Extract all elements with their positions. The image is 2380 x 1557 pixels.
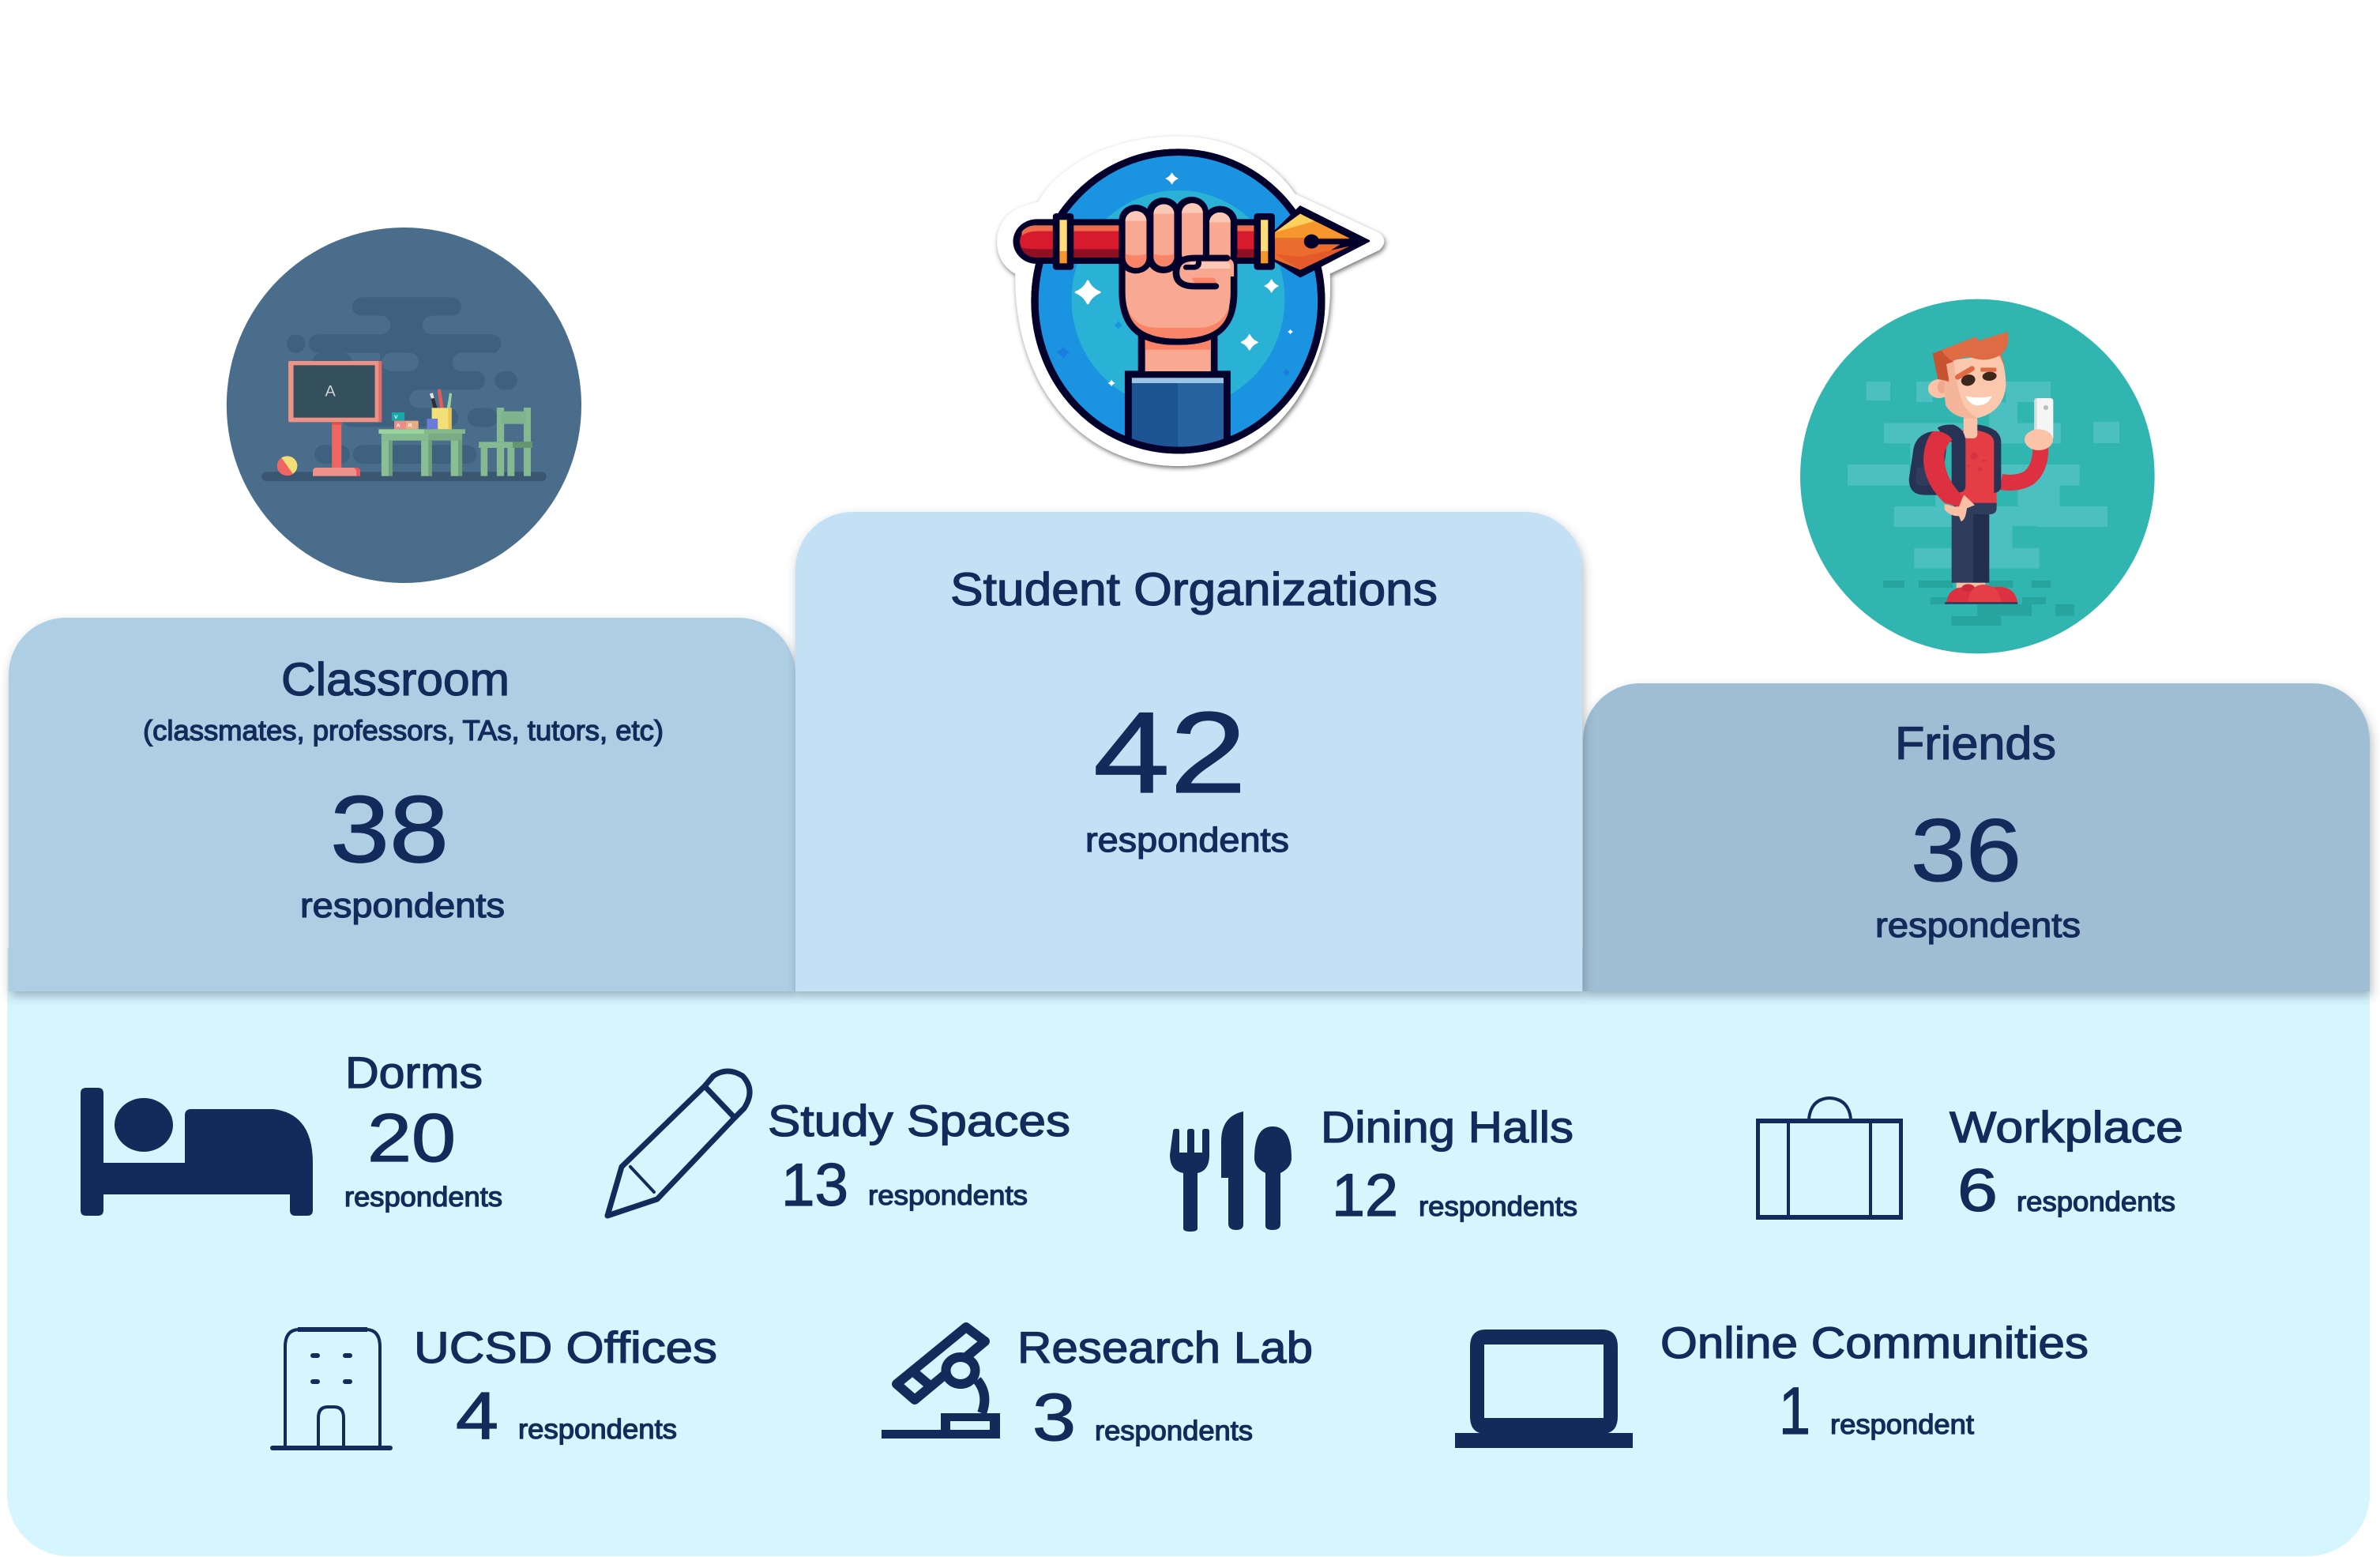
icon: laptop: [1455, 1329, 1633, 1448]
online communities label: Online Communities: [1660, 1318, 2089, 1367]
panel: classroom podium: [9, 618, 795, 991]
panel: student organizations podium: [795, 512, 1582, 991]
icon: classroom illustration: [227, 228, 581, 583]
sparkles: [1056, 173, 1293, 386]
straps: [1938, 424, 2001, 493]
chalkboard: A: [325, 383, 337, 401]
workplace count: 6: [1957, 1157, 1998, 1224]
workplace respondents: respondents: [2017, 1187, 2175, 1217]
icon: office building: [273, 1329, 390, 1448]
venue: research lab: [882, 1322, 1313, 1454]
fist: [1119, 197, 1237, 345]
venue: study spaces: [607, 1071, 1070, 1219]
table: [378, 429, 465, 476]
nib: [1275, 207, 1369, 276]
backpack: [1909, 431, 1949, 495]
study spaces label: Study Spaces: [768, 1096, 1070, 1145]
icon: student with phone: [1800, 299, 2155, 653]
chalkboard: [288, 361, 382, 476]
legs and shoes: [1945, 511, 2017, 604]
icon: pen in fist sticker: [997, 137, 1384, 466]
panel: friends podium: [1583, 683, 2370, 991]
badge circle: [1035, 152, 1322, 450]
student organizations count: 42: [1093, 688, 1246, 817]
icon: pencil: [607, 1071, 750, 1216]
icon: bed: [81, 1088, 313, 1216]
study spaces respondents: respondents: [868, 1180, 1028, 1211]
ball: [277, 456, 297, 476]
blocks and pencil cup: V: [394, 415, 398, 420]
chair: [479, 408, 532, 476]
head: [1928, 332, 2008, 419]
dining halls label: Dining Halls: [1321, 1102, 1574, 1152]
icon: cutlery: [1170, 1111, 1292, 1232]
right arm and phone: [2001, 398, 2053, 483]
dining halls respondents: respondents: [1419, 1191, 1577, 1222]
thumb: [1176, 258, 1234, 286]
left arm and hand: [1923, 431, 1975, 521]
blocks and pencil cup: [392, 389, 452, 429]
friends heading: Friends: [1895, 718, 2056, 769]
torso: [1953, 416, 1997, 514]
panel: lower venues: [7, 948, 2370, 1556]
wrist: [1138, 334, 1217, 371]
workplace label: Workplace: [1949, 1102, 2183, 1152]
icon: microscope: [882, 1327, 1000, 1439]
classroom subheading: (classmates, professors, TAs, tutors, etc): [143, 714, 664, 747]
sticker backing: [997, 137, 1384, 466]
research lab respondents: respondents: [1095, 1416, 1253, 1446]
venue: online communities: [1455, 1318, 2089, 1448]
blocks and pencil cup: A: [397, 423, 400, 429]
classroom count: 38: [330, 777, 449, 882]
dorms label: Dorms: [345, 1047, 483, 1097]
classroom heading: Classroom: [281, 654, 509, 705]
study spaces count: 13: [781, 1152, 848, 1219]
pen barrel: [1013, 213, 1275, 270]
dorms respondents: respondents: [344, 1182, 502, 1213]
venue: workplace: [1756, 1098, 2183, 1224]
classroom respondents label: respondents: [300, 886, 505, 925]
blocks and pencil cup: R: [408, 423, 412, 429]
research lab label: Research Lab: [1017, 1322, 1313, 1372]
ucsd offices respondents: respondents: [518, 1414, 677, 1445]
icon: suitcase: [1756, 1098, 1903, 1217]
venue: dining halls: [1170, 1102, 1577, 1232]
sleeve: [1125, 370, 1231, 453]
online communities respondent: respondent: [1830, 1409, 1974, 1440]
ucsd offices label: UCSD Offices: [414, 1322, 717, 1372]
student organizations respondents label: respondents: [1085, 821, 1289, 859]
dining halls count: 12: [1332, 1162, 1398, 1229]
dorms count: 20: [367, 1100, 456, 1176]
friends respondents label: respondents: [1875, 906, 2081, 945]
student organizations heading: Student Organizations: [950, 564, 1438, 615]
venue: ucsd offices: [273, 1322, 717, 1453]
ucsd offices count: 4: [456, 1378, 498, 1453]
research lab count: 3: [1032, 1380, 1076, 1454]
online communities count: 1: [1779, 1374, 1810, 1448]
venue: dorms: [81, 1047, 502, 1216]
friends count: 36: [1911, 801, 2021, 900]
